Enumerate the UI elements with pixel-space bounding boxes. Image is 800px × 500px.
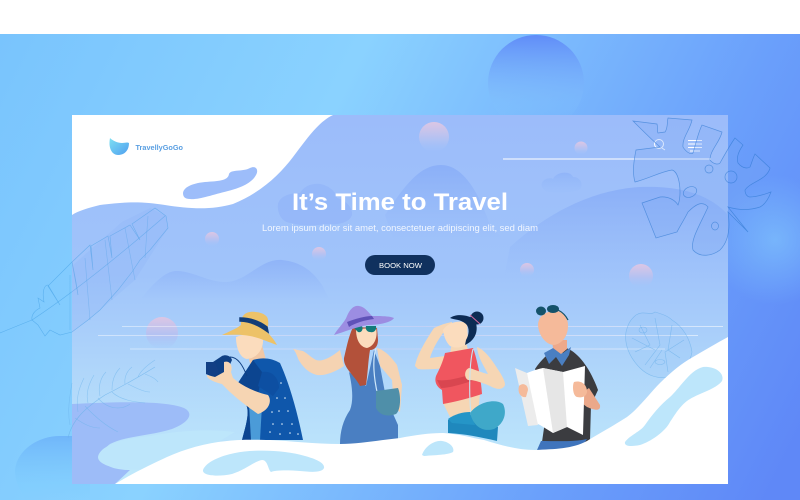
low hills on left (164, 260, 314, 276)
nav underline (503, 158, 711, 160)
red top (435, 348, 482, 404)
white top-left wave (72, 115, 333, 215)
sunglasses on head (536, 305, 568, 320)
neck (450, 342, 468, 354)
waist fold (448, 412, 475, 425)
neck and ear (247, 345, 266, 372)
background glow (710, 175, 800, 305)
button: book now (365, 255, 435, 275)
hat band (240, 318, 268, 332)
top shading (437, 372, 482, 388)
traveller: woman in purple hat (293, 306, 402, 444)
cloud behind title (278, 184, 352, 225)
shoulder bag (376, 388, 400, 416)
face (236, 335, 263, 359)
button: book now: BOOK NOW (379, 261, 423, 270)
arm (575, 388, 600, 410)
bottom-left pale blob (98, 446, 108, 466)
hair bun (470, 312, 484, 324)
palm leaf left (0, 208, 168, 336)
subtitle: Lorem ipsum dolor sit amet, consectetuer adipiscing elit, sed diam (262, 223, 538, 234)
traveller: man with map (515, 305, 600, 451)
back arm and hand to forehead (415, 322, 452, 369)
left hand (519, 384, 528, 397)
small monstera leaf (626, 312, 692, 378)
sleeve (258, 372, 279, 396)
small cloud right (554, 172, 576, 178)
face (443, 322, 468, 348)
traveller: man with camera (206, 312, 303, 440)
pale blob in white wave right (625, 367, 723, 446)
map left flap (515, 368, 538, 426)
floating spheres (146, 122, 653, 349)
hair (450, 315, 477, 345)
horizontal wind lines (98, 326, 723, 350)
title: It’s Time to Travel (292, 189, 508, 216)
white bottom wave (115, 337, 728, 484)
hair tie (470, 315, 480, 324)
strap (374, 348, 378, 396)
icon: search (654, 140, 665, 150)
shirt dots (269, 382, 299, 435)
bag strap (470, 349, 473, 415)
hat band (347, 316, 374, 327)
right hand (573, 382, 587, 397)
logo icon (109, 138, 129, 155)
head (538, 311, 568, 345)
teal pants (448, 412, 498, 441)
collar (544, 347, 571, 366)
large hill on right (531, 187, 728, 232)
pale blob in white wave middle (422, 441, 453, 456)
blue blob in white wave (183, 167, 257, 199)
leaf shading on panel (72, 208, 168, 332)
icon: menu (688, 140, 702, 151)
camera strap (230, 357, 247, 376)
map shaded panel (543, 368, 567, 433)
traveller: woman in red top (415, 312, 505, 441)
right shoulder and arm (377, 348, 402, 412)
midriff (443, 394, 480, 417)
trousers (537, 439, 587, 451)
feather leaf bottom left (68, 360, 158, 438)
right arm (465, 347, 505, 389)
shoulder bag (470, 401, 505, 430)
face (356, 328, 377, 348)
hat (222, 312, 277, 345)
pointing arm (293, 349, 344, 375)
hair (344, 327, 378, 386)
panel: hero card (72, 115, 728, 484)
purple hat (334, 306, 394, 335)
camera front (206, 362, 219, 376)
map (527, 366, 585, 435)
neck (552, 340, 567, 354)
mountain behind title (395, 165, 480, 202)
pale blob in white wave left (203, 451, 324, 476)
shirt (238, 358, 303, 440)
decorative sun circle (488, 35, 584, 131)
dress (340, 350, 398, 444)
camera (206, 355, 232, 378)
tropical leaf top right (633, 118, 771, 255)
arm and hand (207, 362, 270, 414)
bottom-left blue circle (15, 436, 90, 500)
shirt (535, 348, 598, 445)
logo text: TravellyGoGo (136, 143, 183, 152)
bottom-left periwinkle blob (72, 402, 189, 484)
sunglasses (354, 326, 376, 332)
